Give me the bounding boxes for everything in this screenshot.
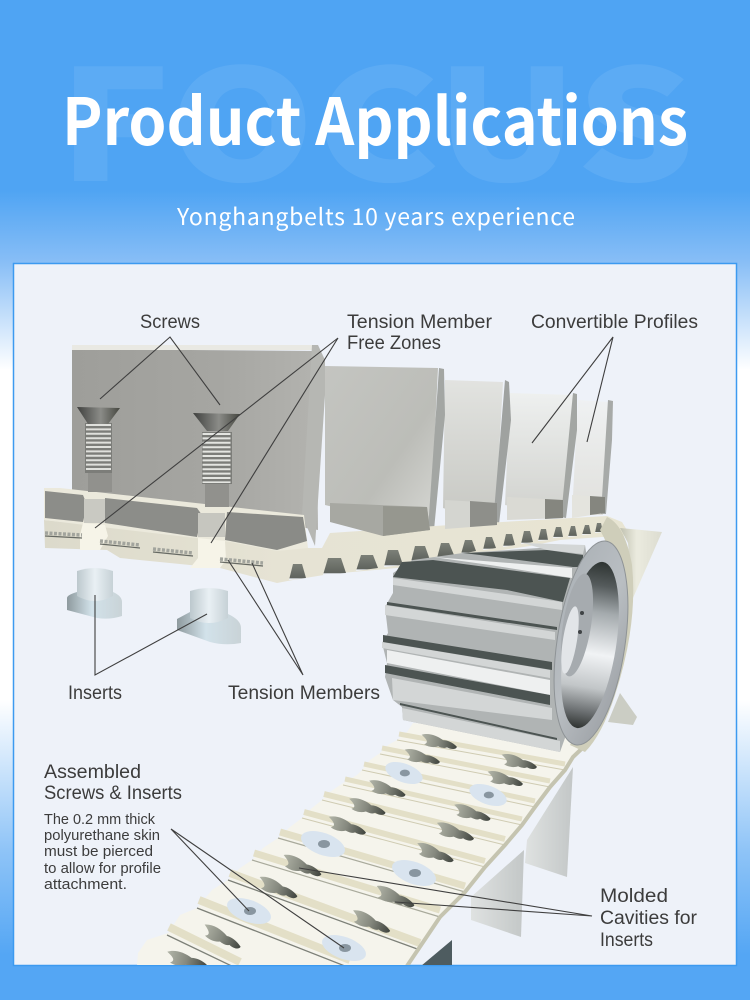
label: Convertible Profiles: Convertible Profiles [531,312,698,333]
label: Molded Cavities for Inserts [600,886,698,951]
rib surface [137,723,595,966]
pulley [382,517,662,752]
label: Molded Cavities for Inserts: Cavities for [600,908,698,929]
label: Assembled Screws & Inserts: Screws & Inserts [44,783,182,804]
hub inner crescent [558,605,582,675]
profile panel 3 [443,380,511,525]
insert 1 [67,568,122,619]
light bands [382,543,585,752]
label: Assembled Screws & Inserts [44,762,182,804]
belt right side edge [407,738,593,966]
text block: skin note [44,812,161,893]
base blocks [44,488,605,568]
belt body [44,516,630,583]
text block: skin note: The 0.2 mm thick [44,812,156,828]
pulley ring [542,536,640,750]
hub bolts [578,611,584,634]
rear belt flap [620,528,662,598]
belt teeth [289,523,603,580]
profile panel 2 [325,366,445,530]
pulley body [382,545,600,752]
label: Tension Members: Tension Members [228,683,380,704]
molded cavities [165,733,538,972]
label: Tension Member Free Zones: Free Zones [347,333,441,354]
text block: skin note: must be pierced [44,844,153,860]
rib side bands [169,734,565,962]
label: Inserts: Inserts [68,683,122,704]
panel: belt diagram [14,264,736,972]
label: Screws: Screws [140,312,200,333]
hub disc [555,571,599,679]
label: Assembled Screws & Inserts: Assembled [44,762,141,783]
tension member cords [45,533,263,566]
screw 2 [193,413,240,507]
lower belt with cavities [137,723,595,972]
screw 1 [77,407,120,492]
pulley bore [551,558,629,732]
lower tail flap [608,693,637,725]
label: Tension Member Free Zones: Tension Member [347,312,493,333]
subtitle: Yonghangbelts 10 years experience [176,198,575,232]
title: Product Applications [62,70,688,164]
text block: skin note: to allow for profile [44,861,161,877]
leader lines [95,337,613,948]
label: Molded Cavities for Inserts: Inserts [600,930,653,951]
upper belt with profiles [44,345,630,583]
white bands [387,557,572,695]
insert 2 [177,588,241,644]
rib valley lines [167,740,565,970]
profile panel 4 [505,393,577,518]
watermark: FOCUS: FOCUS [58,3,695,226]
big profile panel [72,345,325,546]
dark grooves [383,550,583,740]
assembled inserts [224,758,510,966]
wrapped belt strip [570,517,633,752]
text block: skin note: attachment. [44,877,127,893]
text block: skin note: polyurethane skin [44,828,160,844]
label: Molded Cavities for Inserts: Molded [600,886,668,907]
belt flaps [421,767,573,966]
label: Tension Member Free Zones [347,312,493,354]
profile panel 5 [572,400,613,515]
